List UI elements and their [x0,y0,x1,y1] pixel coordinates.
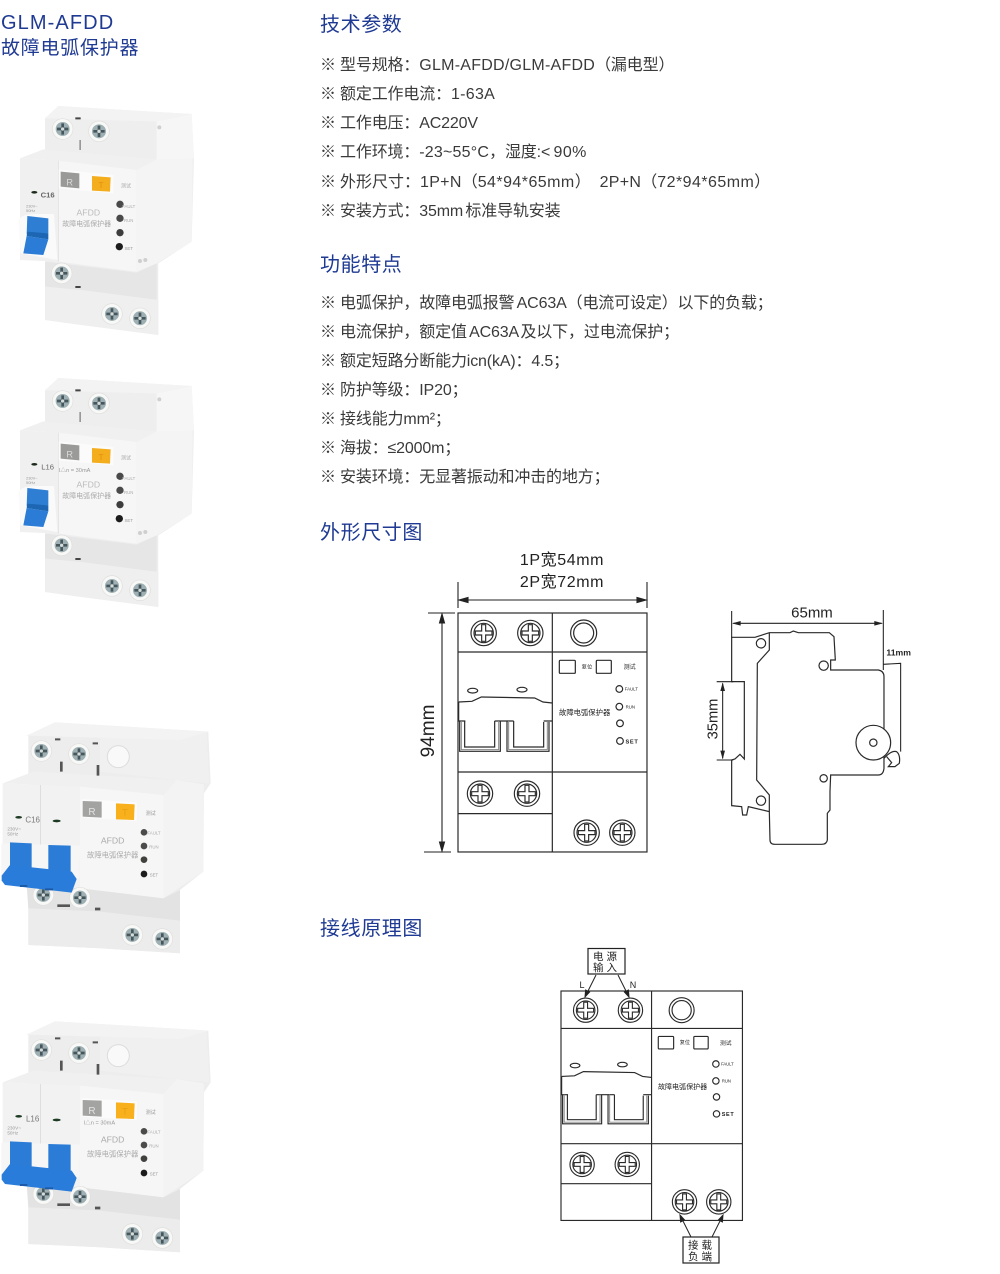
panel: feature list: 额定短路分断能力icn(kA)：4.5； [340,353,569,370]
panel: technical parameter list: ※ [320,86,336,103]
product photo: 2P+N AFDD C16: 230V~ [7,826,21,831]
panel: technical parameter list: ※ [320,144,336,161]
front panel outline: FAULT [625,687,638,692]
height dimension arrow [424,613,455,852]
product photo: 2P+N AFDD L16 residual current [1,1021,211,1252]
product photo: 2P+N AFDD C16: FAULT [147,830,161,835]
product photo: 1P+N AFDD C16: C16 [41,191,55,200]
product photo: 1P+N AFDD C16: R [66,177,73,187]
product photo: 2P+N AFDD L16 residual current: L16 [26,1115,40,1124]
product photo: 1P+N AFDD C16: RUN [124,218,133,223]
wiring panel outline: 测试 [720,1039,732,1047]
callout: power input: 输入 [593,961,620,974]
product photo: 2P+N AFDD C16: AFDD [101,835,124,845]
height dimension label: 94mm [418,705,439,757]
front panel outline: 复位 [582,662,593,670]
callout: load terminals: 负端 [688,1250,715,1263]
wiring panel outline: 故障电弧保护器 [658,1082,707,1091]
product photo: 1P+N AFDD C16: T [98,180,104,190]
panel: feature list: 防护等级：IP20； [340,382,467,399]
product photo: 1P+N AFDD L16 residual current: 故障电弧保护器 [62,491,111,500]
heading: features: 功能特点 [320,254,402,276]
panel: feature list: 接线能力mm²； [340,411,451,428]
product photo: 2P+N AFDD C16: RUN [149,844,159,849]
product title: GLM-AFDD [1,12,114,34]
product photo: 2P+N AFDD L16 residual current: FAULT [147,1129,161,1134]
wiring panel outline: FAULT [721,1062,734,1067]
product photo: 2P+N AFDD C16: 50Hz [7,832,19,837]
product photo: 1P+N AFDD L16 residual current [18,378,194,607]
product photo: 1P+N AFDD L16 residual current: 230V~ [26,475,38,480]
dimension 11mm: 11mm [886,648,911,658]
product photo: 2P+N AFDD C16: T [122,808,128,818]
arrows: load terminals [680,1215,723,1237]
product photo: 1P+N AFDD C16: 测试 [121,182,131,189]
product photo: 1P+N AFDD C16: SET [124,246,133,251]
product photo: 2P+N AFDD C16: R [88,807,96,818]
front panel outline: SET [625,739,638,745]
product photo: 1P+N AFDD L16 residual current: FAULT [122,476,136,481]
product photo: 2P+N AFDD C16: C16 [25,816,41,825]
panel: technical parameter list: 额定工作电流：1-63A [340,86,495,103]
wiring panel outline: 复位 [680,1039,690,1046]
arrows: power input to terminals [585,975,629,997]
callout: load terminals [683,1237,719,1263]
product photo: 1P+N AFDD L16 residual current: 测试 [121,454,131,461]
panel: feature list: 电弧保护，故障电弧报警 AC63A（电流可设定）以下的负载； [340,295,773,312]
product photo: 2P+N AFDD L16 residual current: T [122,1107,128,1117]
width dimension labels: 1P宽54mm [520,551,604,569]
front panel outline [458,613,647,852]
product photo: 2P+N AFDD L16 residual current: R [88,1106,96,1117]
front panel outline: RUN [626,704,635,709]
product photo: 2P+N AFDD L16 residual current: 测试 [146,1109,156,1116]
product photo: 2P+N AFDD L16 residual current: AFDD [101,1134,124,1144]
panel: feature list: ※ [320,469,336,486]
heading: outline dimensions: 外形尺寸图 [320,522,423,544]
depth dimension 65mm: 65mm [791,604,833,621]
product photo: 1P+N AFDD L16 residual current: T [98,452,104,462]
product photo: 1P+N AFDD L16 residual current: 50Hz [26,480,35,485]
panel: technical parameter list: ※ [320,174,336,191]
product photo: 2P+N AFDD C16: 故障电弧保护器 [87,851,139,860]
width dimension arrow [458,582,647,608]
product photo: 1P+N AFDD C16: FAULT [122,204,136,209]
callout: power input: L [579,980,585,990]
product photo: 2P+N AFDD L16 residual current: SET [150,1172,159,1177]
panel: technical parameter list [320,56,770,220]
product photo: 2P+N AFDD C16: 测试 [146,810,156,817]
front dimension drawing [418,551,647,852]
product photo: 1P+N AFDD C16: 故障电弧保护器 [62,219,111,228]
panel: technical parameter list: ※ [320,115,336,132]
panel: feature list: 电流保护，额定值 AC63A 及以下，过电流保护； [340,324,679,341]
product photo: 2P+N AFDD L16 residual current: RUN [149,1143,159,1148]
rail dimension 35mm [705,682,733,760]
panel: feature list: ※ [320,295,336,312]
callout: power input [579,948,636,990]
product photo: 2P+N AFDD L16 residual current: 故障电弧保护器 [87,1150,139,1159]
product photo: 1P+N AFDD C16 [18,106,194,335]
panel: feature list [320,294,773,486]
product photo: 2P+N AFDD C16: SET [150,873,159,878]
side dimension drawing [705,604,911,844]
panel: technical parameter list: 外形尺寸：1P+N（54*94*65mm） 2P+N（72*94*65mm） [340,174,770,191]
wiring panel outline: RUN [722,1079,731,1084]
panel: feature list: ※ [320,324,336,341]
rail dimension 35mm: 35mm [705,699,721,739]
product photo: 1P+N AFDD L16 residual current: RUN [124,490,133,495]
product photo: 1P+N AFDD C16: 50Hz [26,208,35,213]
side profile outline [732,631,900,844]
width dimension labels: 2P宽72mm [520,573,604,591]
panel: technical parameter list: ※ [320,57,336,74]
width dimension labels [520,551,604,591]
heading: wiring diagram: 接线原理图 [320,918,423,940]
panel: technical parameter list: 型号规格：GLM-AFDD/GLM-AFDD（漏电型） [340,57,674,74]
callout: power input: 电源 [593,950,620,963]
product photo: 2P+N AFDD L16 residual current: I△n = 30mA [84,1119,115,1127]
heading: technical parameters: 技术参数 [320,14,402,36]
product photo: 1P+N AFDD L16 residual current: AFDD [77,480,100,490]
product photo: 2P+N AFDD C16 [1,722,211,953]
product photo: 1P+N AFDD L16 residual current: I△n = 30mA [59,466,91,474]
panel: feature list: 海拔：≤2000m； [340,440,460,457]
front panel outline: 测试 [624,663,636,671]
front panel outline: 故障电弧保护器 [559,708,611,717]
panel: technical parameter list: 工作电压：AC220V [340,115,478,132]
panel: feature list: 安装环境：无显著振动和冲击的地方； [340,469,609,486]
product photo: 1P+N AFDD L16 residual current: R [66,449,73,459]
wiring panel outline [561,991,742,1220]
callout: power input: N [630,980,636,990]
panel: technical parameter list: 工作环境：-23~55°C，湿度:< 90% [340,144,587,161]
panel: feature list: ※ [320,440,336,457]
product photo: 2P+N AFDD L16 residual current: 50Hz [7,1131,19,1136]
product title [1,12,139,59]
dimension 11mm [883,648,911,752]
callout: load terminals: 接载 [688,1238,715,1252]
panel: technical parameter list: ※ [320,203,336,220]
wiring diagram [561,948,742,1263]
product photo: 1P+N AFDD L16 residual current: L16 [41,463,54,472]
product photo: 2P+N AFDD L16 residual current: 230V~ [7,1125,21,1130]
product title: 故障电弧保护器 [1,38,139,59]
depth dimension 65mm [732,604,883,670]
panel: feature list: ※ [320,411,336,428]
panel: feature list: ※ [320,353,336,370]
panel: technical parameter list: 安装方式：35mm 标准导轨安装 [340,203,560,220]
product photo: 1P+N AFDD L16 residual current: SET [124,518,133,523]
wiring panel outline: SET [722,1112,734,1118]
product photo: 1P+N AFDD C16: AFDD [77,208,100,218]
panel: feature list: ※ [320,382,336,399]
product photo: 1P+N AFDD C16: 230V~ [26,203,38,208]
